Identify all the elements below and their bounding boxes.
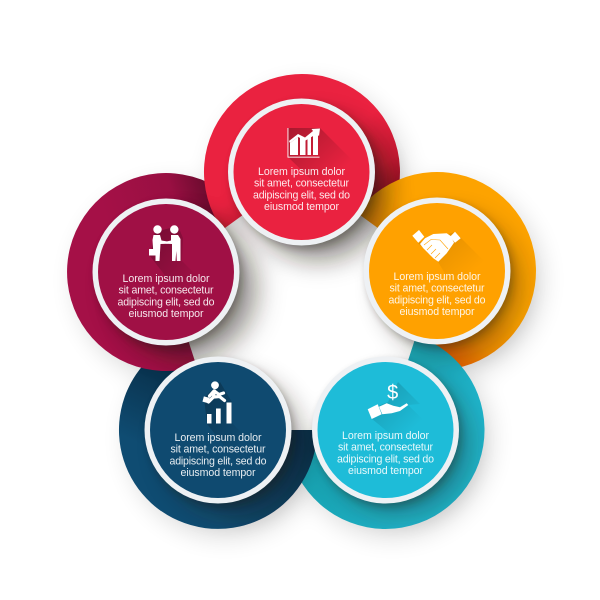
text block: sit amet, consectetur bbox=[338, 442, 433, 454]
text block bbox=[388, 271, 486, 318]
text block: adipiscing elit, sed do bbox=[170, 455, 267, 467]
icon: businessman running up bars bbox=[202, 381, 232, 424]
icon: growth chart bbox=[288, 128, 320, 158]
icon: hand holding a dollar bbox=[368, 382, 408, 419]
text block bbox=[118, 273, 215, 320]
text block: sit amet, consectetur bbox=[254, 178, 349, 190]
text block: eiusmod tempor bbox=[264, 201, 339, 213]
icon: handshake bbox=[412, 230, 461, 262]
text block: Lorem ipsum dolor bbox=[258, 166, 345, 178]
orange arc bbox=[357, 172, 536, 370]
panel: navy circle bbox=[144, 356, 292, 504]
red arc bbox=[204, 74, 400, 230]
text block: Lorem ipsum dolor bbox=[174, 432, 262, 444]
text block: adipiscing elit, sed do bbox=[118, 296, 215, 308]
icon: hand holding a dollar: $ bbox=[387, 382, 398, 404]
text block: adipiscing elit, sed do bbox=[388, 294, 486, 306]
teal arc bbox=[288, 336, 485, 529]
panel: burgundy circle bbox=[92, 198, 240, 346]
text block: eiusmod tempor bbox=[400, 306, 475, 318]
text block: eiusmod tempor bbox=[128, 308, 204, 320]
text block: adipiscing elit, sed do bbox=[253, 189, 350, 201]
text block bbox=[337, 430, 434, 477]
text block: Lorem ipsum dolor bbox=[122, 273, 210, 285]
text block: eiusmod tempor bbox=[348, 465, 423, 477]
text block: eiusmod tempor bbox=[180, 467, 256, 479]
text block: adipiscing elit, sed do bbox=[337, 453, 434, 465]
soft drop shadow of the arcs bbox=[74, 83, 543, 538]
ring shadows bbox=[96, 103, 522, 516]
panel: teal circle bbox=[312, 356, 459, 504]
text block: sit amet, consectetur bbox=[390, 283, 485, 295]
icon: business people shaking hands bbox=[149, 225, 180, 261]
text block bbox=[253, 166, 350, 213]
text block bbox=[170, 432, 267, 479]
navy arc: tail under burgundy bbox=[119, 341, 187, 511]
text block: Lorem ipsum dolor bbox=[342, 430, 429, 442]
panel: red circle bbox=[228, 98, 375, 246]
panel: orange circle bbox=[364, 198, 510, 344]
burgundy arc bbox=[67, 173, 237, 371]
text block: Lorem ipsum dolor bbox=[394, 271, 481, 283]
text block: sit amet, consectetur bbox=[118, 285, 214, 297]
text block: sit amet, consectetur bbox=[170, 444, 266, 456]
navy arc: head over teal bbox=[154, 430, 317, 529]
